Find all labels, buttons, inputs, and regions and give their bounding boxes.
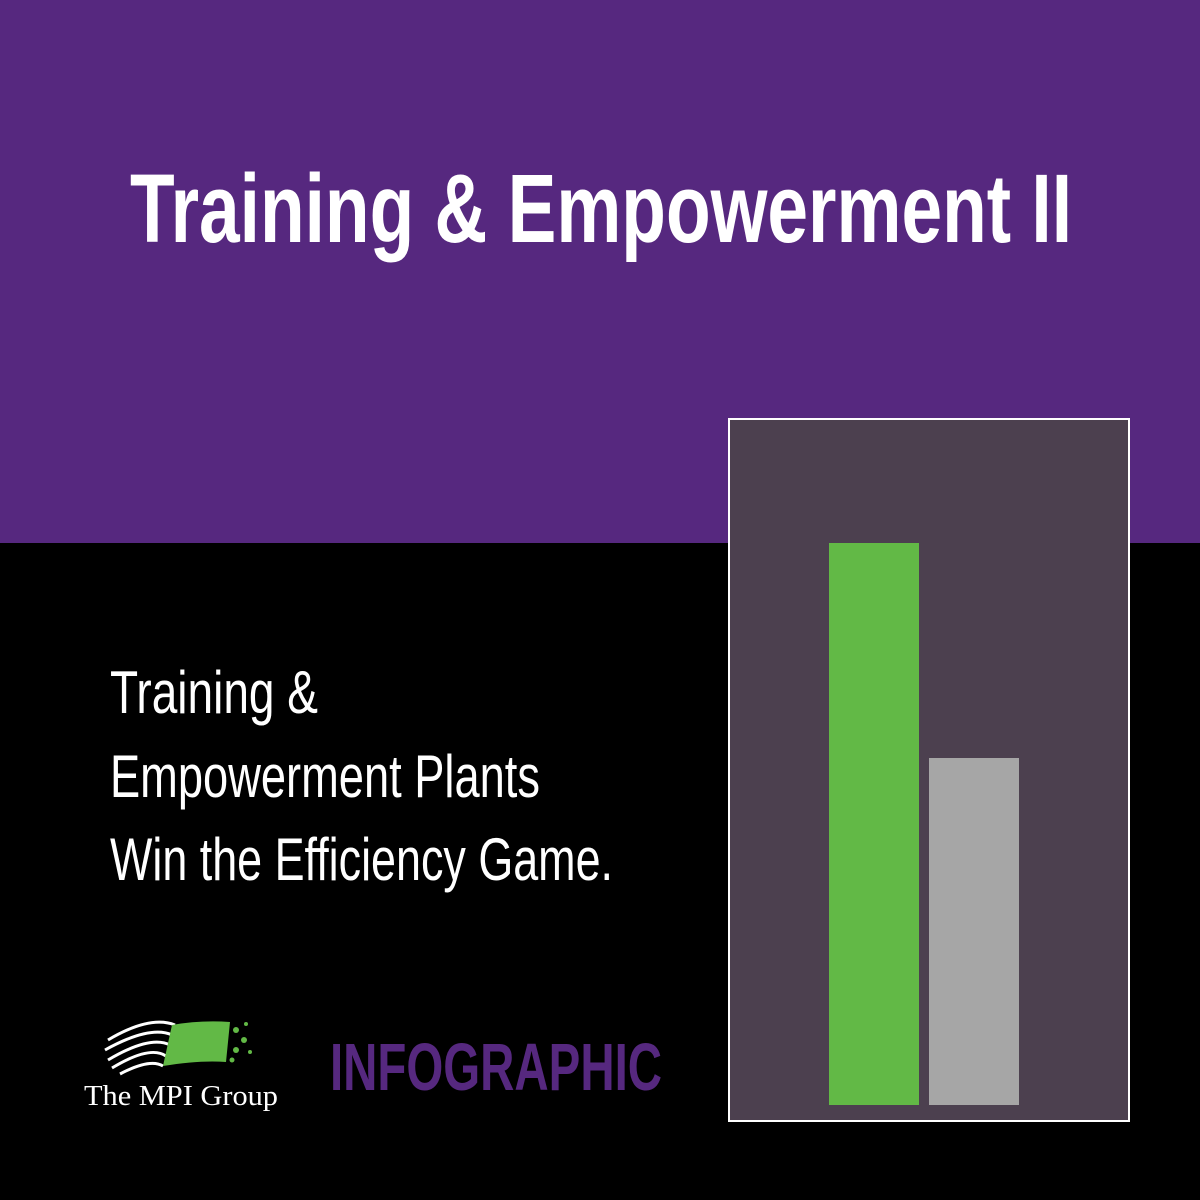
logo: MPI Group — [84, 1021, 278, 1112]
body text: Training & — [110, 659, 318, 726]
header band — [0, 0, 1200, 543]
label: INFOGRAPHIC: INFOGRAPHIC — [330, 1030, 662, 1105]
chart panel — [729, 419, 1129, 1121]
body text: Win the Efficiency Game. — [110, 826, 613, 893]
bar: gray — [929, 758, 1019, 1105]
body text: Empowerment Plants — [110, 743, 540, 810]
body text — [110, 659, 613, 893]
logo: MPI Group: The MPI Group — [84, 1081, 278, 1112]
bar: green — [829, 543, 919, 1105]
